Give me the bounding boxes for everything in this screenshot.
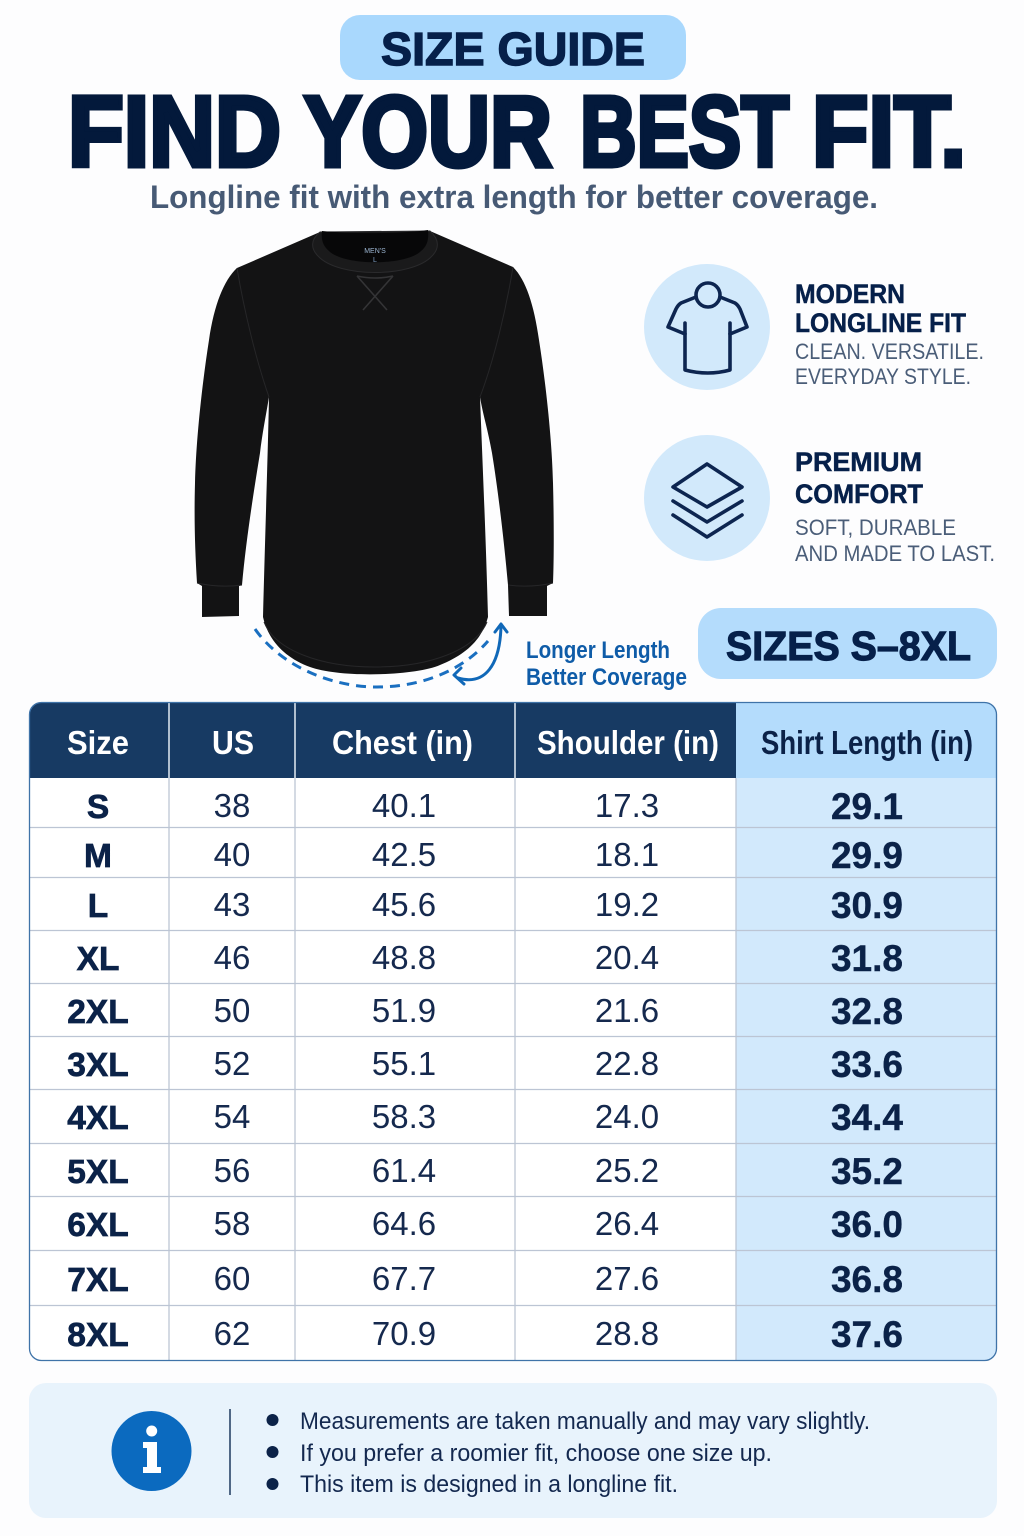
row 8XL: 62 bbox=[214, 1315, 250, 1352]
feature text: SOFT, DURABLE bbox=[795, 515, 956, 540]
row 6XL: 58 bbox=[214, 1205, 250, 1242]
arrow: longer length bbox=[454, 624, 507, 684]
title: BEST bbox=[580, 76, 789, 188]
row 2XL: 32.8 bbox=[831, 991, 903, 1032]
row 8XL: 70.9 bbox=[372, 1315, 436, 1352]
row 3XL: 52 bbox=[214, 1045, 250, 1082]
row 3XL bbox=[67, 1044, 903, 1085]
row 5XL: 25.2 bbox=[595, 1152, 659, 1189]
icon: layers bbox=[644, 435, 770, 561]
row XL: 48.8 bbox=[372, 939, 436, 976]
row XL: 31.8 bbox=[831, 938, 903, 979]
row 3XL: 22.8 bbox=[595, 1045, 659, 1082]
row 2XL bbox=[67, 991, 903, 1032]
table header bbox=[67, 724, 973, 761]
row XL: 20.4 bbox=[595, 939, 659, 976]
feature text bbox=[795, 279, 984, 389]
dashed hem curve bbox=[255, 629, 488, 687]
row M: 40 bbox=[214, 836, 250, 873]
row 5XL: 5XL bbox=[67, 1154, 129, 1191]
feature: modern longline fit bbox=[644, 264, 984, 390]
row 6XL: 26.4 bbox=[595, 1205, 659, 1242]
badge: sizes range bbox=[698, 608, 997, 679]
row XL bbox=[77, 938, 903, 979]
notes panel bbox=[29, 1383, 997, 1518]
row S: S bbox=[87, 789, 109, 826]
row 4XL: 4XL bbox=[67, 1100, 129, 1137]
row S: 17.3 bbox=[595, 787, 659, 824]
shirt illustration bbox=[195, 230, 554, 674]
row 5XL bbox=[67, 1151, 903, 1192]
row XL: 46 bbox=[214, 939, 250, 976]
callout text: Longer Length bbox=[526, 637, 670, 664]
neck label: L bbox=[373, 257, 377, 264]
badge: size guide: SIZE GUIDE bbox=[381, 23, 645, 75]
row 2XL: 21.6 bbox=[595, 992, 659, 1029]
row 3XL: 33.6 bbox=[831, 1044, 903, 1085]
badge: sizes range: SIZES S–8XL bbox=[726, 623, 971, 669]
subtitle: Longline fit with extra length for better coverage. bbox=[150, 179, 878, 215]
feature: premium comfort bbox=[644, 435, 995, 566]
row 6XL: 64.6 bbox=[372, 1205, 436, 1242]
row M: 18.1 bbox=[595, 836, 659, 873]
table backgrounds bbox=[30, 702, 996, 1360]
row XL: XL bbox=[77, 941, 119, 978]
feature text: PREMIUM bbox=[795, 447, 922, 477]
feature text: EVERYDAY STYLE. bbox=[795, 364, 971, 389]
row 6XL bbox=[67, 1204, 903, 1245]
row 8XL: 37.6 bbox=[831, 1314, 903, 1355]
feature text: LONGLINE FIT bbox=[795, 308, 966, 338]
seams bbox=[197, 267, 553, 667]
row L: 19.2 bbox=[595, 886, 659, 923]
row 7XL: 36.8 bbox=[831, 1259, 903, 1300]
row M bbox=[84, 835, 903, 876]
row L: 43 bbox=[214, 886, 250, 923]
table header: Shirt Length (in) bbox=[761, 724, 973, 761]
neck label: MEN'S bbox=[364, 248, 386, 255]
row 4XL: 24.0 bbox=[595, 1098, 659, 1135]
row L: 30.9 bbox=[831, 885, 903, 926]
row M: 29.9 bbox=[831, 835, 903, 876]
feature text: COMFORT bbox=[795, 479, 923, 509]
callout text bbox=[526, 637, 687, 691]
title: FIT. bbox=[812, 76, 966, 188]
neck label bbox=[364, 248, 386, 264]
row 7XL: 60 bbox=[214, 1260, 250, 1297]
row 8XL: 8XL bbox=[67, 1317, 129, 1354]
shirt body bbox=[195, 231, 554, 674]
row 4XL: 58.3 bbox=[372, 1098, 436, 1135]
feature text: CLEAN. VERSATILE. bbox=[795, 339, 984, 364]
icon: info bbox=[112, 1411, 192, 1491]
row 3XL: 55.1 bbox=[372, 1045, 436, 1082]
row L: L bbox=[88, 888, 108, 925]
row L bbox=[88, 885, 903, 926]
table header: US bbox=[212, 724, 254, 761]
row S: 38 bbox=[214, 787, 250, 824]
callout text: Better Coverage bbox=[526, 664, 687, 691]
row 7XL: 27.6 bbox=[595, 1260, 659, 1297]
note 3: This item is designed in a longline fit. bbox=[300, 1471, 678, 1498]
title: YOUR bbox=[304, 76, 552, 188]
note 1: Measurements are taken manually and may vary slightly. bbox=[300, 1408, 870, 1435]
table header: Chest (in) bbox=[332, 724, 473, 761]
note 2: If you prefer a roomier fit, choose one size up. bbox=[300, 1440, 772, 1467]
feature text: AND MADE TO LAST. bbox=[795, 541, 995, 566]
collar bbox=[313, 231, 437, 272]
row 7XL bbox=[67, 1259, 903, 1300]
row S bbox=[87, 786, 903, 827]
table header: Size bbox=[67, 724, 129, 761]
row M: M bbox=[84, 838, 112, 875]
feature text: MODERN bbox=[795, 279, 905, 309]
title: FIND bbox=[68, 76, 281, 188]
row 4XL: 54 bbox=[214, 1098, 250, 1135]
row 2XL: 51.9 bbox=[372, 992, 436, 1029]
row 6XL: 6XL bbox=[67, 1207, 129, 1244]
row 3XL: 3XL bbox=[67, 1047, 129, 1084]
row 4XL: 34.4 bbox=[831, 1097, 903, 1138]
row M: 42.5 bbox=[372, 836, 436, 873]
row 2XL: 50 bbox=[214, 992, 250, 1029]
row S: 40.1 bbox=[372, 787, 436, 824]
row 4XL bbox=[67, 1097, 903, 1138]
row 8XL bbox=[67, 1314, 903, 1355]
neck opening bbox=[322, 230, 428, 262]
row 6XL: 36.0 bbox=[831, 1204, 903, 1245]
row 2XL: 2XL bbox=[67, 994, 129, 1031]
row S: 29.1 bbox=[831, 786, 903, 827]
row 5XL: 61.4 bbox=[372, 1152, 436, 1189]
collar stitch bbox=[357, 276, 393, 310]
row 7XL: 7XL bbox=[67, 1262, 129, 1299]
row 5XL: 56 bbox=[214, 1152, 250, 1189]
row 7XL: 67.7 bbox=[372, 1260, 436, 1297]
size table bbox=[30, 702, 996, 1361]
title bbox=[68, 76, 966, 188]
icon: t-shirt bbox=[644, 264, 770, 390]
row L: 45.6 bbox=[372, 886, 436, 923]
row 8XL: 28.8 bbox=[595, 1315, 659, 1352]
feature text bbox=[795, 447, 995, 566]
badge: size guide bbox=[340, 15, 686, 80]
table header: Shoulder (in) bbox=[537, 724, 719, 761]
row 5XL: 35.2 bbox=[831, 1151, 903, 1192]
